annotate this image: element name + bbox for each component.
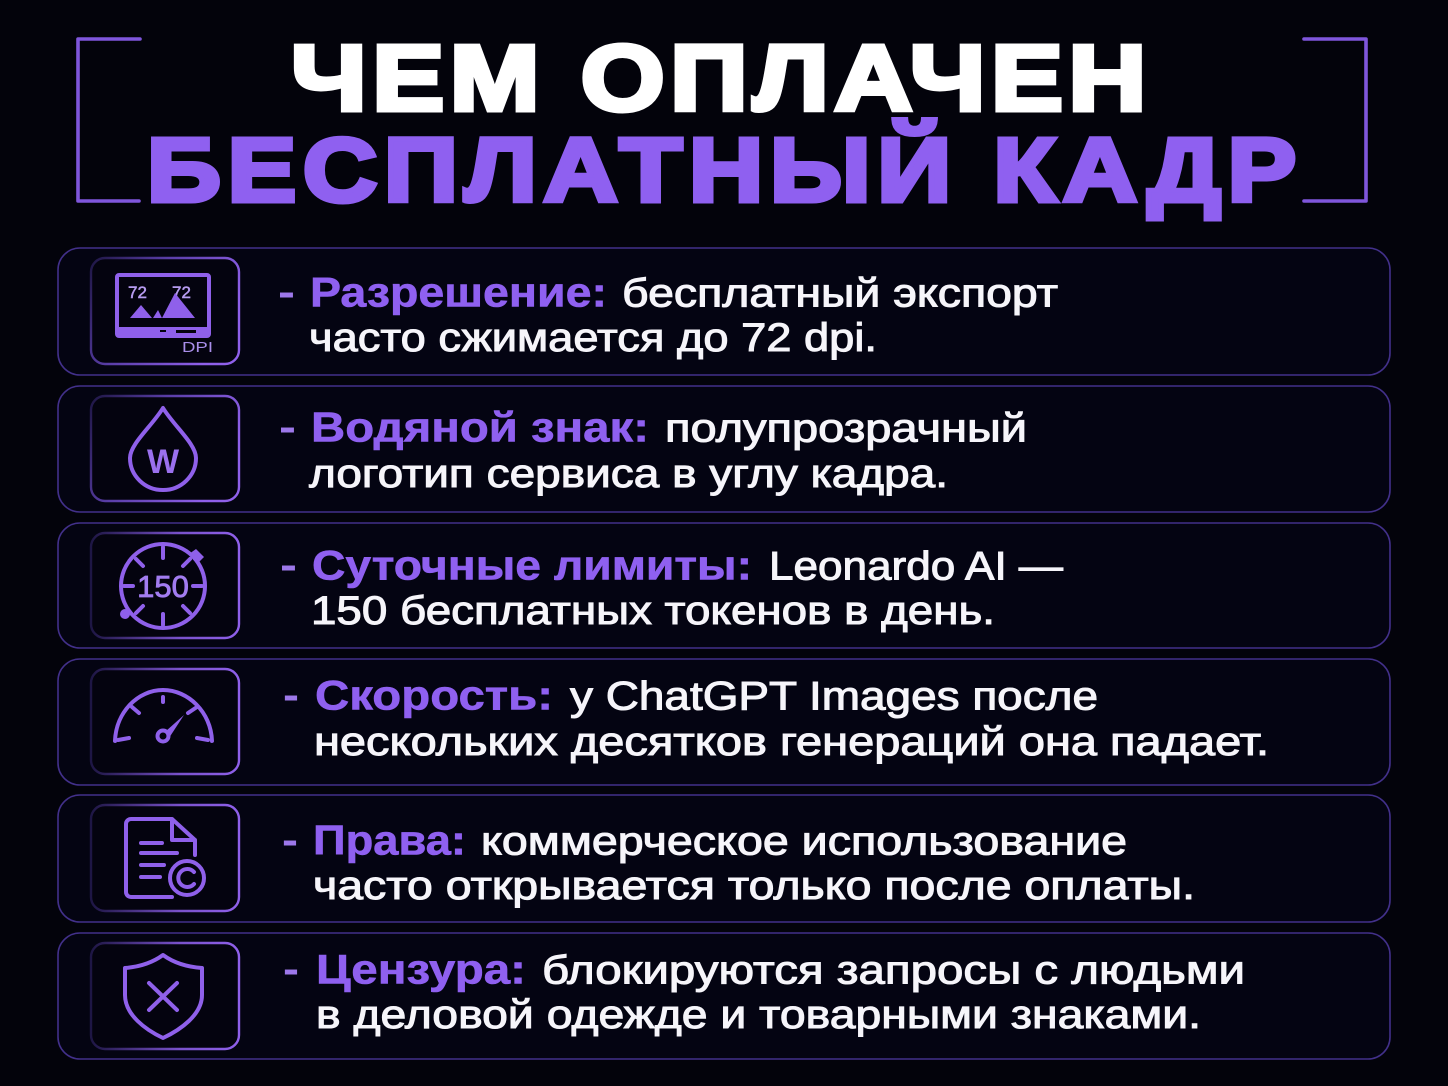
text: speed: нескольких десятков генераций она падает.	[314, 720, 1269, 764]
icon: monitor 72 dpi	[91, 258, 239, 364]
panel: daily limits	[58, 523, 1390, 648]
icon: speedometer	[91, 669, 239, 774]
panel: rights	[58, 795, 1390, 922]
text: watermark: полупрозрачный	[665, 406, 1027, 450]
text: daily limits	[280, 541, 1063, 633]
title line 2: БЕСПЛАТНЫЙ КАДР	[147, 118, 1303, 221]
text: watermark	[279, 403, 1027, 496]
text: censorship: в деловой одежде и товарными знаками.	[316, 993, 1201, 1037]
icon: water drop	[91, 396, 239, 501]
text: daily limits: 150 бесплатных токенов в день.	[311, 589, 995, 633]
text: speed: у ChatGPT Images после	[570, 674, 1098, 718]
text: censorship: блокируются запросы с людьми	[542, 948, 1245, 992]
title bracket right	[1304, 39, 1366, 201]
text: watermark: Водяной знак:	[311, 404, 649, 450]
icon: monitor 72 dpi: DPI	[182, 339, 213, 356]
text: rights: Права:	[313, 816, 466, 864]
icon: 150 timer	[91, 533, 239, 638]
text: daily limits: Leonardo AI —	[769, 544, 1063, 588]
text: rights	[282, 816, 1195, 908]
text: rights: коммерческое использование	[481, 820, 1127, 864]
text: resolution: Разрешение:	[310, 268, 607, 316]
text: rights: часто открывается только после оплаты.	[313, 864, 1195, 908]
title bracket left	[78, 39, 140, 201]
text: censorship: -	[283, 945, 299, 992]
icon: monitor 72 dpi: 72	[172, 283, 191, 302]
text: censorship: Цензура:	[316, 946, 526, 992]
panel: resolution	[58, 248, 1390, 375]
icon: document copyright	[91, 805, 239, 911]
text: watermark: логотип сервиса в углу кадра.	[309, 452, 948, 496]
text: speed: -	[283, 671, 299, 718]
panel: watermark	[58, 386, 1390, 512]
text: resolution	[278, 268, 1058, 360]
text: resolution: -	[278, 268, 295, 315]
icon: water drop: W	[147, 443, 180, 481]
icon: 150 timer: 150	[137, 569, 189, 604]
text: rights: -	[282, 816, 298, 863]
text: speed	[283, 671, 1269, 764]
text: watermark: -	[279, 403, 296, 450]
panel: censorship	[58, 933, 1390, 1059]
icon: monitor 72 dpi: 72	[128, 283, 147, 302]
text: censorship	[283, 945, 1245, 1037]
text: resolution: бесплатный экспорт	[622, 272, 1058, 316]
text: speed: Скорость:	[315, 672, 553, 718]
text: resolution: часто сжимается до 72 dpi.	[309, 316, 877, 360]
title	[78, 26, 1366, 221]
text: daily limits: -	[280, 541, 297, 588]
text: daily limits: Суточные лимиты:	[312, 542, 752, 588]
panel: speed	[58, 659, 1390, 785]
icon: shield cross	[91, 943, 239, 1049]
title line 1: ЧЕМ ОПЛАЧЕН	[291, 26, 1152, 130]
